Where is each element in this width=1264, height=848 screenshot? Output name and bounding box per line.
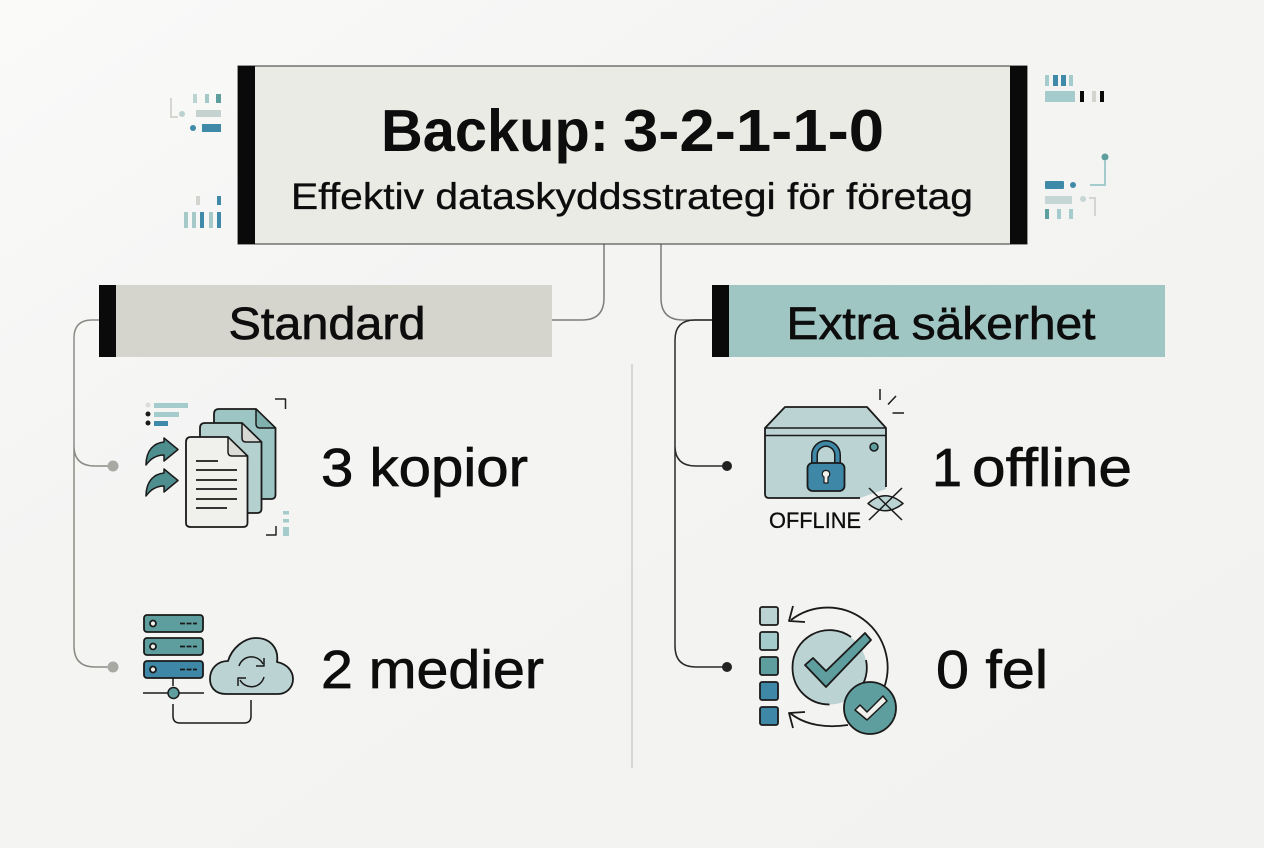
heading: 3-2-1-1-0: [623, 98, 884, 164]
heading: Backup:: [381, 98, 609, 164]
icon part: colour squares: [760, 607, 778, 725]
connector: Extra säkerhet tree: [675, 320, 732, 672]
label: 0 fel: 0 fel: [936, 640, 1048, 700]
icon part: small legend: [146, 402, 188, 426]
icon part: padlock: [808, 444, 844, 491]
label: 2 medier: 2 medier: [321, 640, 544, 700]
panel: Extra säkerhet header: Extra säkerhet: [786, 298, 1096, 349]
icon part: box: [765, 407, 886, 498]
decoration: top left marks: [171, 94, 221, 132]
title panel: [238, 66, 1027, 244]
icon part: crossed eye: [868, 488, 903, 520]
decoration: lower right marks: [1045, 154, 1108, 219]
icon part: cloud: [210, 638, 293, 694]
icon part: arrows: [146, 438, 178, 465]
icon part: back document: [214, 409, 276, 499]
icon part: large check circle: [792, 630, 866, 704]
icon part: sync arrows: [238, 657, 264, 687]
vertical divider: [631, 364, 633, 768]
icon: verification checks: [760, 606, 896, 734]
label: 1 offline: 1: [932, 438, 962, 498]
panel: Standard header: Standard: [228, 298, 426, 349]
icon part: front document: [186, 437, 248, 527]
icon part: spark lines: [880, 389, 904, 413]
label: 3 kopior: 3 kopior: [321, 438, 528, 498]
subtitle: Effektiv dataskyddsstrategi för företag: [291, 176, 973, 217]
decoration: lower left marks: [184, 196, 221, 228]
icon part: corner brackets: [266, 399, 286, 535]
icon part: OFFLINE text: OFFLINE: [769, 508, 861, 533]
icon part: middle document: [200, 423, 262, 513]
label: 1 offline: offline: [972, 438, 1132, 498]
icon part: circular arrows: [789, 606, 888, 728]
icon part: small check badge: [844, 682, 896, 734]
icon part: network node: [143, 678, 251, 723]
icon: servers and cloud: [143, 615, 293, 723]
connector lines from title to panels: [552, 244, 712, 320]
panel: Extra säkerhet header: [712, 285, 1165, 357]
heading: [381, 98, 884, 164]
decoration: top right marks: [1045, 75, 1104, 102]
connector: Standard tree: [74, 320, 118, 672]
panel: Standard header: [99, 285, 552, 357]
icon part: side marks: [283, 511, 289, 536]
icon part: server stack: [144, 615, 203, 678]
icon: document copies: [146, 399, 289, 536]
icon: offline box: [765, 389, 904, 533]
